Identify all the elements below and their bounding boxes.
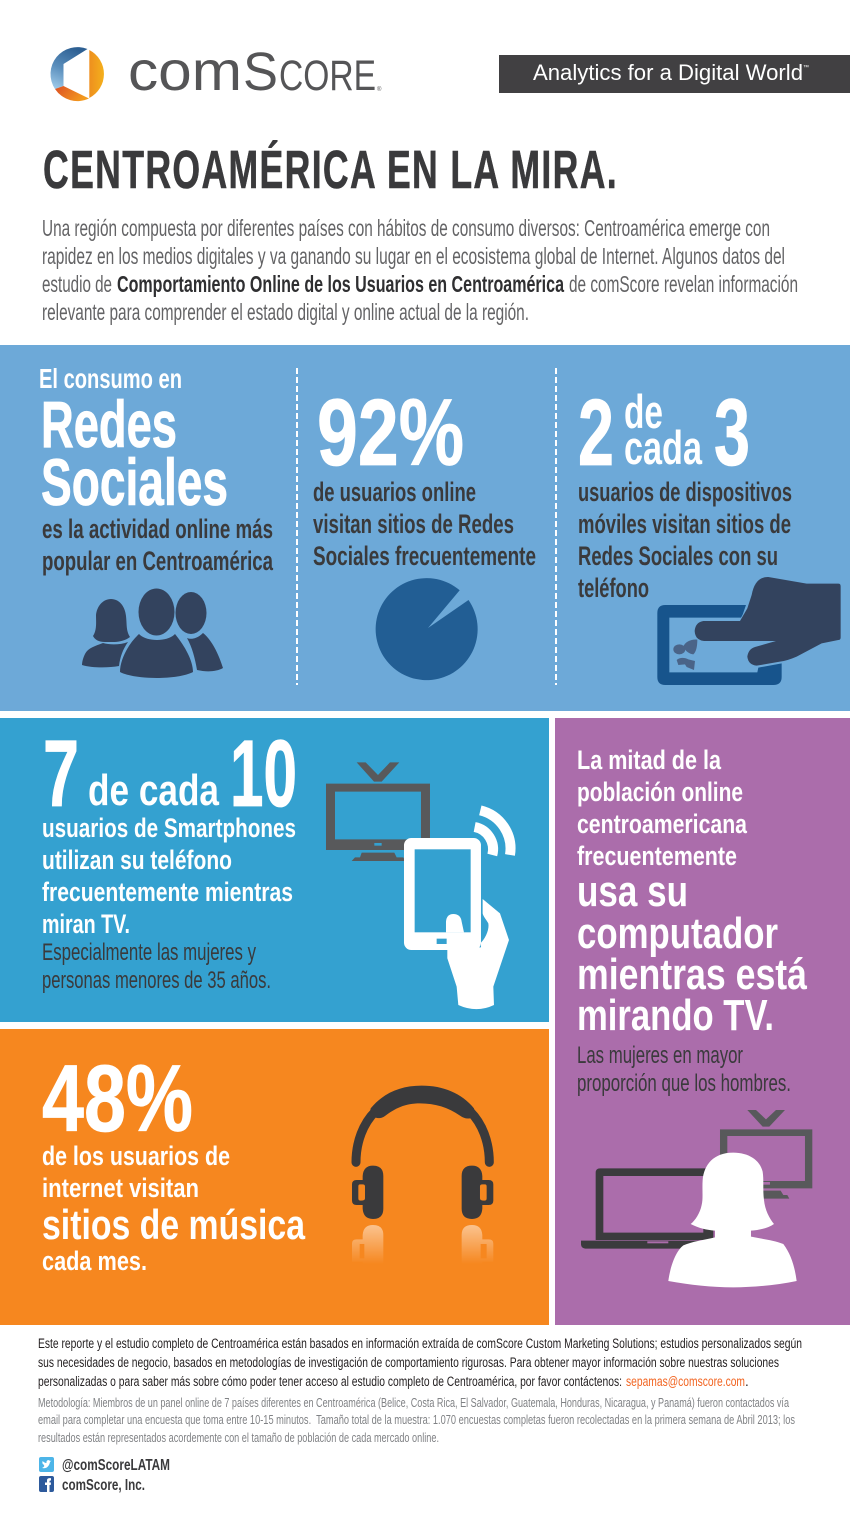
text: 2 de cada 3: 2 [578,380,614,486]
text: 48%: sitios de música [42,1201,306,1248]
text: la mitad de la población: computador [577,909,778,958]
text: 7 de cada 10 [42,721,297,994]
text: 7 de cada 10: usuarios de Smartphones [42,813,296,843]
text: 7 de cada 10: 7 [43,721,79,827]
intro paragraph: Comportamiento Online de los Usuarios en Centroamérica [117,271,565,297]
text: la mitad de la población: Las mujeres en mayor [577,1042,743,1069]
text: la mitad de la población: mirando TV. [577,991,774,1040]
text: el consumo en redes sociales: popular en Centroamérica [42,546,274,576]
comScore wordmark: S [243,42,278,102]
text: la mitad de la población: frecuentemente [577,841,737,871]
pie chart: 92% [376,578,478,680]
text: el consumo en redes sociales: Sociales [41,445,228,519]
header [51,39,850,102]
text: el consumo en redes sociales: El consumo en [39,363,182,394]
comScore wordmark: ® [377,86,382,93]
icon: people group [82,588,223,678]
text: la mitad de la población: La mitad de la [577,745,722,775]
text: 48%: internet visitan [42,1173,199,1203]
icon: woman with laptop and TV [581,1110,812,1287]
text: 2 de cada 3: de [624,385,663,438]
text: la mitad de la población: población online [577,777,743,807]
icon: facebook [39,1476,54,1492]
text: 48% [42,1046,306,1276]
text: 92%: de usuarios online [313,477,476,507]
text: about the report: sepamas@comscore.com [626,1374,745,1389]
text: about the report: personalizadas o para saber más sobre cómo poder tener acceso al estudio completo de Centroamérica, por favor contáctenos: [38,1374,622,1389]
text: la mitad de la población: usa su [577,867,688,916]
text: el consumo en redes sociales: Redes [41,387,177,461]
text: methodology: resultados están representados acordemente con el tamaño de población de cada mercado online. [38,1431,439,1445]
text: 7 de cada 10: personas menores de 35 años. [42,967,271,994]
icon: twitter [39,1457,54,1472]
text: 92%: Sociales frecuentemente [313,541,536,571]
text: 48%: cada mes. [42,1246,147,1276]
icon: hand on tablet [657,577,841,685]
intro paragraph [42,215,798,325]
text: 2 de cada 3: 3 [714,380,750,486]
text: 2 de cada 3: teléfono [578,573,649,603]
text: la mitad de la población [577,745,807,1097]
intro paragraph: relevante para comprender el estado digital y online actual de la región. [42,299,529,325]
text: 2 de cada 3: cada [624,421,703,474]
panel: smartphones y TV [0,718,549,1022]
icon: headphones [352,1086,493,1264]
tagline bar: Analytics for a Digital World [533,60,803,85]
text: 48%: 48% [42,1046,193,1152]
text: 7 de cada 10: 10 [230,721,297,827]
text: 92%: visitan sitios de Redes [313,509,514,539]
text: 7 de cada 10: de cada [88,766,219,815]
text: about the report: . [745,1374,749,1389]
text: el consumo en redes sociales [39,363,274,576]
text: 7 de cada 10: Especialmente las mujeres y [42,939,256,966]
panel: redes sociales [0,345,850,711]
text: methodology [38,1396,795,1445]
tagline bar [499,55,850,93]
footer [38,1336,802,1494]
comScore wordmark: CORE [279,52,376,100]
text: about the report [38,1336,802,1389]
text: facebook name: comScore, Inc. [62,1477,145,1494]
text: 7 de cada 10: frecuentemente mientras [42,877,293,907]
comScore wordmark: com [128,39,242,102]
icon: TV and smartphone in hand [326,762,511,1009]
text: 48%: de los usuarios de [42,1141,230,1171]
text: la mitad de la población: centroamericana [577,809,748,839]
text: 7 de cada 10: utilizan su teléfono [42,845,232,875]
text: 92%: 92% [317,380,464,486]
tagline bar: ™ [803,64,809,71]
text: 7 de cada 10: miran TV. [42,909,130,939]
text: 2 de cada 3 [578,380,792,603]
panel: música [0,1029,549,1325]
comScore wordmark [128,39,382,102]
icon: comScore logo mark [51,47,104,101]
text: el consumo en redes sociales: es la actividad online más [42,514,273,544]
text: twitter handle: @comScoreLATAM [62,1457,170,1474]
intro paragraph: estudio de [42,271,112,297]
panel: computador y TV [555,718,850,1325]
text: 92% [313,380,536,571]
